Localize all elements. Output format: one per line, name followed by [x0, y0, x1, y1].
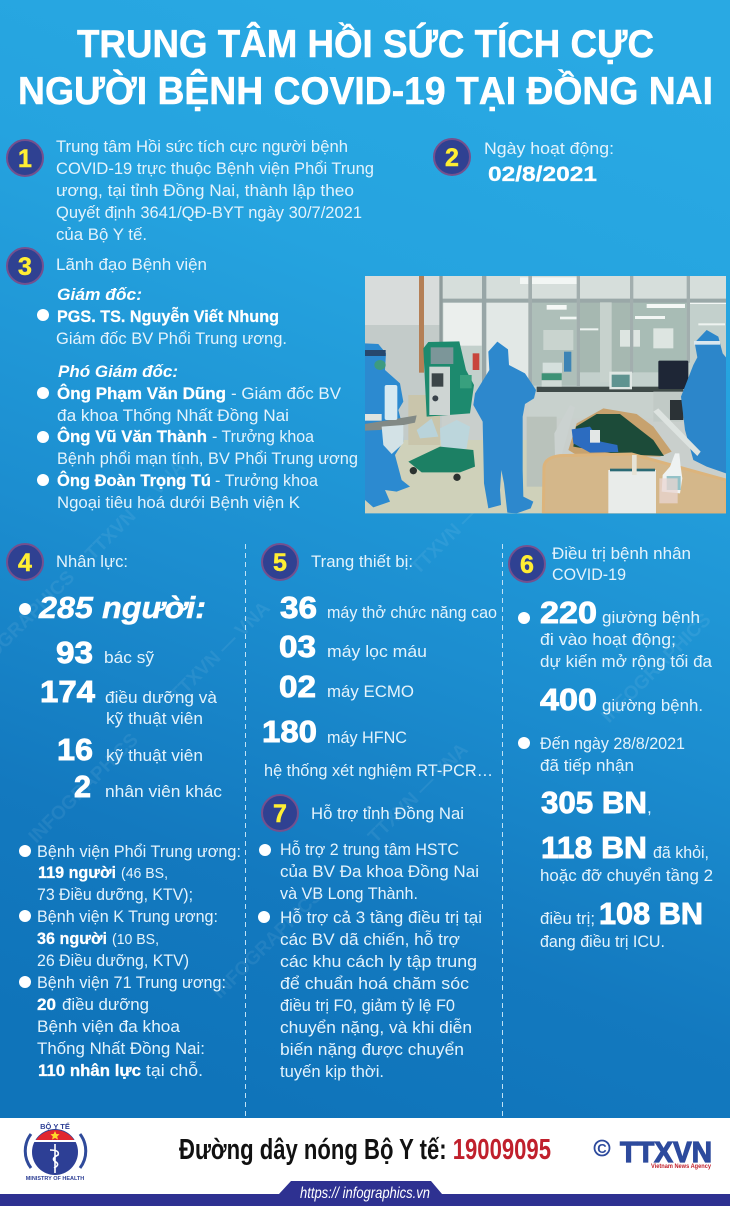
staff left	[365, 343, 417, 507]
section 7: Dong Nai support	[258, 795, 482, 1081]
treatment heading: Điều trị bệnh nhân	[552, 544, 691, 563]
footer	[0, 1118, 730, 1206]
support text	[258, 840, 482, 1081]
equipment list: 03	[279, 629, 316, 664]
leadership heading: Lãnh đạo Bệnh viện	[56, 255, 207, 274]
staff breakdown: điều dưỡng và	[105, 688, 218, 707]
beds: dự kiến mở rộng tối đa	[540, 652, 713, 671]
equipment list: máy thở chức năng cao	[327, 603, 497, 622]
equipment list: 180	[262, 714, 317, 749]
deputy directors: - Giám đốc BV	[231, 384, 342, 403]
support text: Hỗ trợ cả 3 tầng điều trị tại	[280, 908, 482, 927]
deputy directors: Ông Phạm Văn Dũng	[57, 384, 226, 403]
staff breakdown: nhân viên khác	[105, 782, 222, 801]
badge 7	[262, 795, 298, 831]
staff by hospital	[19, 842, 241, 1080]
director: PGS. TS. Nguyễn Viết Nhung	[57, 307, 279, 326]
support heading: Hỗ trợ tỉnh Đồng Nai	[311, 804, 464, 823]
intro text: Trung tâm Hồi sức tích cực người bệnh	[56, 137, 348, 156]
logo: Ministry of Health	[25, 1121, 86, 1182]
website bar: https:// infographics.vn	[300, 1185, 430, 1202]
badge 3	[7, 248, 43, 284]
dialysis machine	[408, 341, 475, 481]
badge 1	[7, 140, 43, 176]
patients: Đến ngày 28/8/2021	[540, 734, 685, 753]
support text: tuyến kịp thời.	[280, 1062, 384, 1081]
text: INFOGRAPHICS	[209, 885, 327, 1003]
section 4: staffing	[7, 544, 241, 1080]
equipment list: máy lọc máu	[327, 642, 427, 661]
director: Giám đốc BV Phổi Trung ương.	[56, 329, 287, 348]
staff by hospital: 26 Điều dưỡng, KTV)	[37, 951, 189, 970]
total staff: 285 người:	[38, 590, 206, 625]
badge 2: 2	[445, 144, 459, 172]
logo: TTXVN: Vietnam News Agency	[651, 1163, 711, 1170]
text: TTXVN — VNA	[364, 739, 473, 847]
beds: 220	[540, 595, 597, 630]
beds: đi vào hoạt động;	[540, 630, 676, 649]
badge 3: 3	[18, 253, 32, 281]
staff breakdown: bác sỹ	[104, 648, 155, 667]
equipment list: hệ thống xét nghiệm RT-PCR…	[264, 761, 493, 780]
operating date	[484, 139, 614, 186]
intro text: của Bộ Y tế.	[56, 225, 147, 244]
deputy directors	[37, 362, 358, 512]
text: TTXVN — VNA	[81, 456, 190, 565]
patients: 305 BN	[541, 785, 647, 820]
beds: 400	[540, 682, 597, 717]
patients: điều trị;	[540, 909, 595, 928]
staff by hospital: (46 BS,	[121, 865, 168, 882]
hotline: Đường dây nóng Bộ Y tế: 19009095	[179, 1134, 551, 1166]
section 5: equipment	[262, 544, 497, 780]
patients: đã khỏi,	[653, 843, 709, 862]
deputy directors: Ông Vũ Văn Thành	[57, 427, 207, 446]
title: TRUNG TÂM HỒI SỨC TÍCH CỰC	[77, 22, 654, 66]
support text: của BV Đa khoa Đồng Nai	[280, 862, 479, 881]
section 2: start date	[434, 139, 614, 186]
patients: 108 BN	[599, 896, 703, 931]
deputy directors: - Trưởng khoa	[215, 471, 319, 490]
beds: giường bệnh	[602, 608, 700, 627]
badge 7: 7	[273, 800, 287, 828]
equipment list	[262, 590, 497, 780]
section 3: leadership	[7, 248, 358, 512]
director	[37, 285, 287, 348]
staff by hospital: điều dưỡng	[62, 995, 149, 1014]
website bar	[0, 1181, 730, 1206]
staff by hospital: 73 Điều dưỡng, KTV);	[37, 885, 193, 904]
badge 4	[7, 544, 43, 580]
badge 5	[262, 544, 298, 580]
support text: để chuẩn hoá chăm sóc	[280, 974, 470, 993]
operating date: 02/8/2021	[488, 163, 597, 186]
staff by hospital: 110 nhân lực	[38, 1061, 141, 1080]
operating date: Ngày hoạt động:	[484, 139, 614, 158]
logo: TTXVN: C	[597, 1141, 607, 1156]
badge 4: 4	[18, 549, 32, 577]
treatment heading	[552, 544, 691, 584]
text: TTXVN — VNA	[166, 598, 275, 706]
medical monitors	[542, 352, 688, 422]
section 1: intro	[7, 137, 374, 244]
staff right	[681, 330, 726, 473]
deputy directors: Ngoại tiêu hoá dưới Bệnh viện K	[57, 493, 301, 512]
beds: giường bệnh.	[602, 696, 703, 715]
staff by hospital: 20	[37, 995, 56, 1014]
staff by hospital: Bệnh viện Phổi Trung ương:	[37, 842, 241, 861]
staff by hospital: Bệnh viện K Trung ương:	[37, 907, 218, 926]
staff breakdown	[40, 635, 222, 804]
staffing heading: Nhân lực:	[56, 552, 128, 571]
text: INFOGRAPHICS	[25, 730, 143, 847]
staff by hospital: Bệnh viện đa khoa	[37, 1017, 181, 1036]
intro text: ương, tại tỉnh Đồng Nai, thành lập theo	[56, 181, 354, 200]
treatment heading: COVID-19	[552, 565, 626, 584]
patient bed	[543, 405, 726, 513]
patients: ,	[647, 798, 652, 817]
patients: hoặc đỡ chuyển tầng 2	[540, 866, 713, 885]
badge 1: 1	[18, 145, 32, 173]
intro text	[56, 137, 374, 244]
section 6: treatment	[509, 544, 713, 951]
director: Giám đốc:	[57, 285, 142, 304]
support text: biến nặng được chuyển	[280, 1040, 464, 1059]
equipment list: máy ECMO	[327, 682, 414, 701]
support text: và VB Long Thành.	[280, 884, 418, 903]
text: TTXVN — VNA	[407, 470, 515, 579]
staff by hospital: Bệnh viện 71 Trung ương:	[37, 973, 226, 992]
staff by hospital: 119 người	[38, 863, 116, 882]
deputy directors: - Trưởng khoa	[212, 427, 314, 446]
equipment heading: Trang thiết bị:	[311, 552, 413, 571]
support text: các khu cách ly tập trung	[280, 952, 477, 971]
deputy directors: đa khoa Thống Nhất Đồng Nai	[57, 406, 289, 425]
staff breakdown: kỹ thuật viên	[106, 746, 203, 765]
staff by hospital: Thống Nhất Đồng Nai:	[37, 1039, 205, 1058]
staff breakdown: 2	[74, 769, 91, 804]
badge 6: 6	[520, 551, 534, 579]
patients: đang điều trị ICU.	[540, 932, 665, 951]
staff by hospital: tại chỗ.	[146, 1061, 203, 1080]
equipment list: máy HFNC	[327, 728, 407, 747]
text: INFOGRAPHICS	[598, 609, 716, 727]
staff breakdown: kỹ thuật viên	[106, 709, 203, 728]
deputy directors: Ông Đoàn Trọng Tú	[57, 471, 211, 490]
patients: đã tiếp nhận	[540, 756, 634, 775]
logo: TTXVN: TTXVN	[620, 1137, 712, 1169]
logo: Ministry of Health: BỘ Y TẾ	[40, 1121, 70, 1131]
badge 2	[434, 139, 470, 175]
deputy directors: Bệnh phổi mạn tính, BV Phổi Trung ương	[57, 449, 358, 468]
equipment list: 02	[279, 669, 316, 704]
support text: Hỗ trợ 2 trung tâm HSTC	[280, 840, 459, 859]
badge 6	[509, 546, 545, 582]
support text: điều trị F0, giảm tỷ lệ F0	[280, 996, 455, 1015]
beds	[518, 595, 713, 717]
deputy directors: Phó Giám đốc:	[58, 362, 178, 381]
photo: ICU ward staff in blue protective suits	[365, 276, 726, 513]
intro text: COVID-19 trực thuộc Bệnh viện Phổi Trung	[56, 159, 374, 178]
patients: 118 BN	[541, 830, 647, 865]
intro text: Quyết định 3641/QĐ-BYT ngày 30/7/2021	[56, 203, 362, 222]
staff breakdown: 174	[40, 674, 96, 709]
support text: chuyển nặng, và khi diễn	[280, 1018, 472, 1037]
staff by hospital: (10 BS,	[112, 931, 159, 948]
title: NGƯỜI BỆNH COVID-19 TẠI ĐỒNG NAI	[18, 69, 713, 113]
staff by hospital: 36 người	[37, 929, 107, 948]
equipment list: 36	[280, 590, 317, 625]
badge 5: 5	[273, 549, 287, 577]
logo: Ministry of Health: MINISTRY OF HEALTH	[26, 1176, 84, 1182]
staff breakdown: 16	[57, 732, 93, 767]
staff center	[473, 342, 536, 513]
patients	[518, 734, 713, 951]
title	[18, 22, 713, 113]
staff breakdown: 93	[56, 635, 93, 670]
support text: các BV dã chiến, hỗ trợ	[280, 930, 460, 949]
